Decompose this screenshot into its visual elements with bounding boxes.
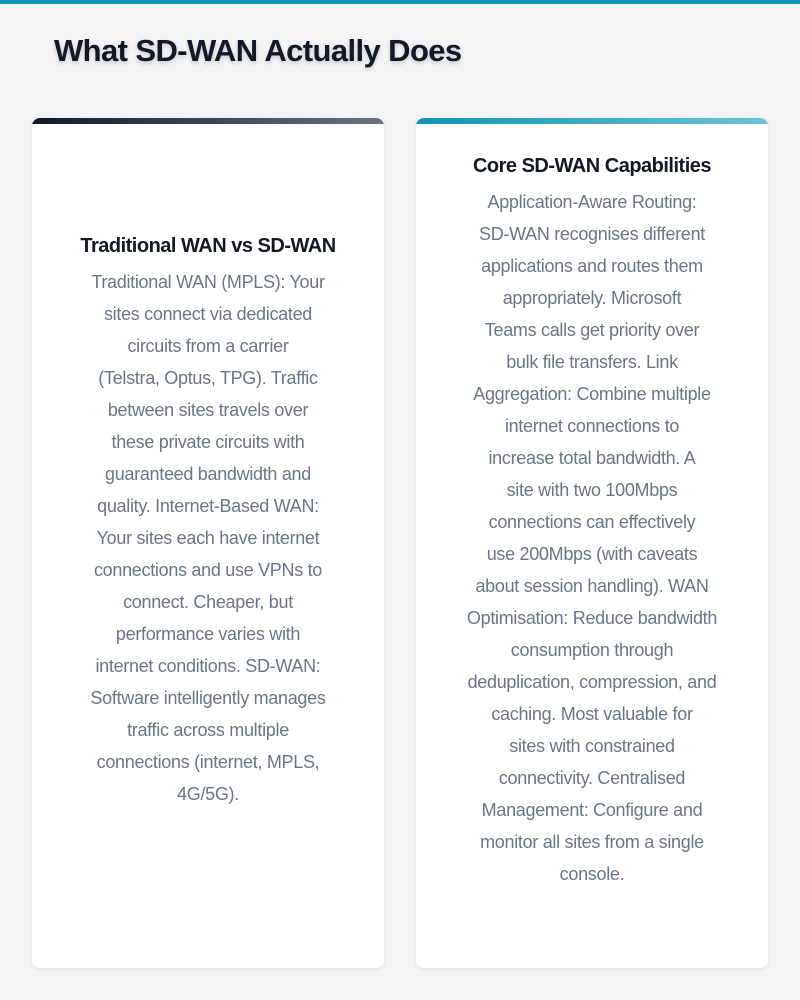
body text: capabilities: appropriately. Microsoft (503, 288, 681, 308)
body text: traditional WAN: Software intelligently manages (90, 688, 326, 708)
body text: traditional WAN: connections (internet, MPLS, (97, 752, 319, 772)
body text: capabilities: Application-Aware Routing: (488, 192, 696, 212)
text block: core capabilities (467, 155, 717, 884)
body text: capabilities: sites with constrained (509, 736, 675, 756)
body text: capabilities: internet connections to (505, 416, 679, 436)
body text: capabilities: use 200Mbps (with caveats (487, 544, 697, 564)
body text: capabilities: Teams calls get priority over (485, 320, 699, 340)
title: What SD-WAN Actually Does (54, 33, 462, 68)
body text: capabilities: about session handling). WAN (475, 576, 709, 596)
body text: traditional WAN: quality. Internet-Based WAN: (97, 496, 319, 516)
body text: capabilities: deduplication, compression, and (468, 672, 716, 692)
body text: capabilities (467, 192, 717, 884)
body text: capabilities: caching. Most valuable for (491, 704, 693, 724)
body text: traditional WAN: performance varies with (116, 624, 300, 644)
body text: capabilities: connectivity. Centralised (499, 768, 685, 788)
text block: traditional WAN (80, 235, 336, 804)
body text: capabilities: connections can effectively (489, 512, 695, 532)
body text: capabilities: Aggregation: Combine multiple (473, 384, 711, 404)
body text: traditional WAN: between sites travels over (108, 400, 308, 420)
body text: traditional WAN: connect. Cheaper, but (123, 592, 293, 612)
body text: traditional WAN: connections and use VPNs to (94, 560, 322, 580)
body text: capabilities: console. (560, 864, 624, 884)
body text: capabilities: Optimisation: Reduce bandwidth (467, 608, 717, 628)
body text: traditional WAN: 4G/5G). (177, 784, 239, 804)
body text: capabilities: applications and routes them (481, 256, 703, 276)
body text: traditional WAN: Traditional WAN (MPLS): Your (91, 272, 325, 292)
body text: traditional WAN: guaranteed bandwidth and (105, 464, 311, 484)
body text: traditional WAN: (Telstra, Optus, TPG). Traffic (98, 368, 318, 388)
body text: capabilities: monitor all sites from a single (480, 832, 704, 852)
body text: traditional WAN: internet conditions. SD-WAN: (95, 656, 321, 676)
body text: capabilities: bulk file transfers. Link (506, 352, 678, 372)
body text: traditional WAN: Your sites each have internet (97, 528, 319, 548)
body text: traditional WAN: traffic across multiple (127, 720, 289, 740)
body text: traditional WAN (90, 272, 326, 804)
panel: traditional WAN vs SD-WAN (32, 118, 384, 968)
body text: traditional WAN: circuits from a carrier (127, 336, 289, 356)
body text: capabilities: increase total bandwidth. A (488, 448, 696, 468)
body text: capabilities: SD-WAN recognises different (479, 224, 705, 244)
body text: capabilities: site with two 100Mbps (507, 480, 677, 500)
panel: core capabilities (416, 118, 768, 968)
heading: traditional WAN vs SD-WAN: Traditional WAN vs SD-WAN (80, 235, 336, 257)
body text: traditional WAN: these private circuits with (112, 432, 304, 452)
heading: core SD-WAN capabilities: Core SD-WAN Capabilities (473, 155, 711, 177)
body text: capabilities: consumption through (511, 640, 673, 660)
body text: traditional WAN: sites connect via dedicated (104, 304, 312, 324)
body text: capabilities: Management: Configure and (482, 800, 702, 820)
